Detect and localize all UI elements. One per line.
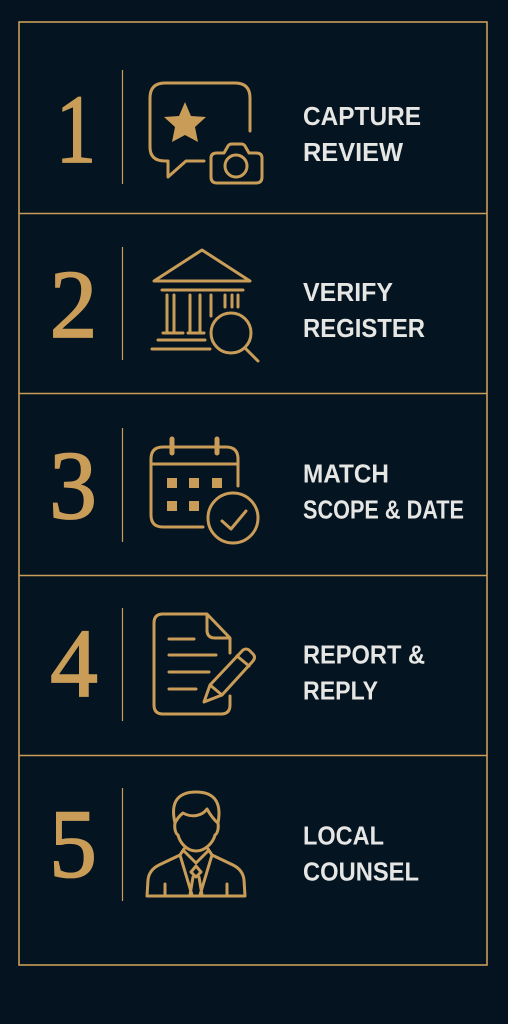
icon: document with pencil: [154, 614, 254, 714]
label: report and reply: REPLY: [303, 676, 378, 706]
label: local counsel: [303, 820, 419, 886]
label: match scope and date: [303, 458, 464, 524]
number 1: 1: [56, 76, 96, 184]
label: report and reply: REPORT &: [303, 640, 425, 670]
label: capture review: [303, 101, 421, 167]
icon: review bubble with star and camera: [150, 83, 262, 183]
label: verify register: REGISTER: [303, 313, 425, 343]
label: verify register: [303, 277, 425, 343]
panel: step 4 report and reply: [50, 608, 425, 721]
label: local counsel: LOCAL: [303, 820, 384, 850]
label: report and reply: [303, 640, 425, 706]
panel: step 3 match scope and date: [49, 428, 464, 543]
number 4: 4: [50, 609, 98, 717]
label: match scope and date: MATCH: [303, 458, 389, 488]
label: capture review: REVIEW: [303, 137, 403, 167]
icon: courthouse with magnifier: [152, 250, 258, 361]
label: capture review: CAPTURE: [303, 101, 421, 131]
number 3: 3: [49, 431, 97, 539]
number 2: 2: [50, 250, 97, 358]
number 5: 5: [49, 789, 97, 898]
label: verify register: VERIFY: [303, 277, 393, 307]
panel: step 2 verify register: [50, 247, 425, 361]
panel: step 1 capture review: [56, 70, 421, 184]
panel: step 5 local counsel: [49, 788, 419, 901]
icon: calendar with check: [151, 439, 258, 543]
label: local counsel: COUNSEL: [303, 856, 419, 886]
label: match scope and date: SCOPE & DATE: [303, 494, 464, 524]
icon: lawyer in suit: [147, 792, 245, 896]
